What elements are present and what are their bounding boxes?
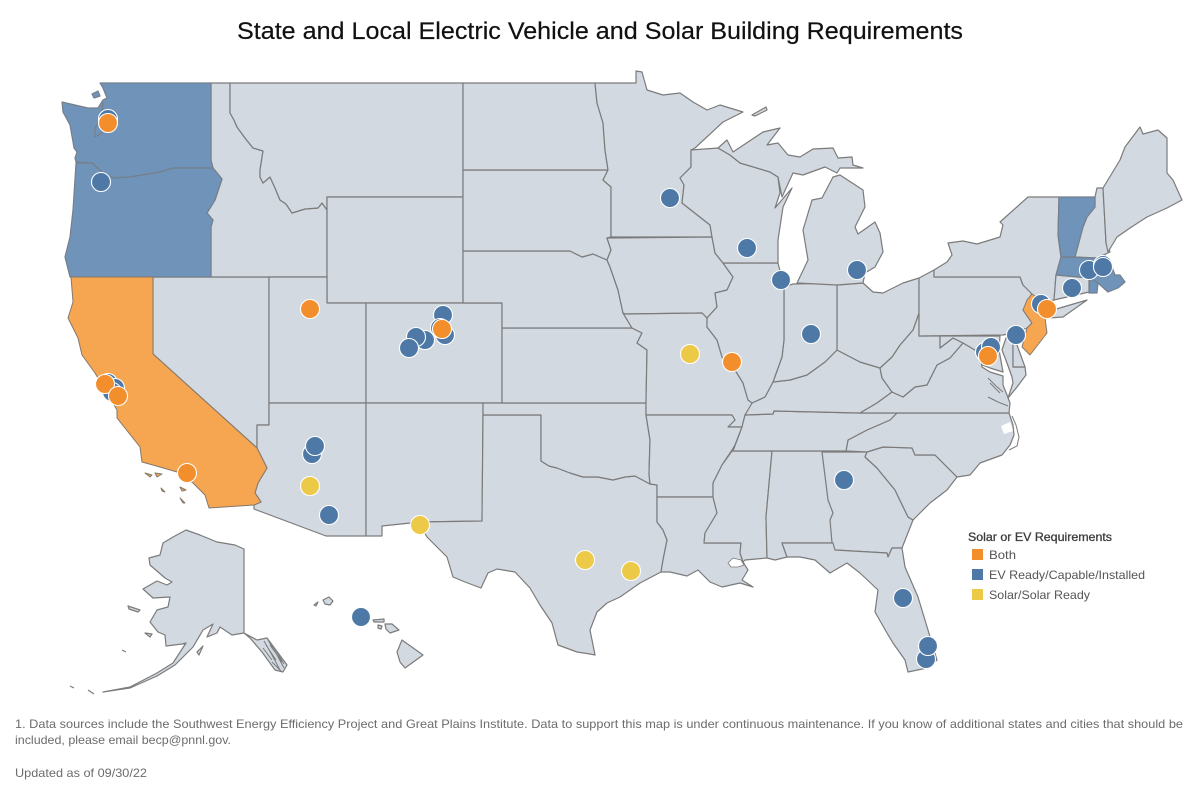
markers: Florida bbox=[894, 588, 938, 668]
Pamlico Sound bbox=[1001, 422, 1013, 434]
marker: Seattle area bbox=[98, 110, 118, 128]
marker: El Paso bbox=[410, 516, 430, 534]
Outer Banks bbox=[1009, 416, 1019, 450]
state: Michigan upper peninsula bbox=[718, 128, 863, 197]
state: Georgia bbox=[822, 452, 913, 557]
state: Missouri bbox=[623, 313, 753, 427]
state: Maryland bbox=[940, 336, 1003, 372]
marker: St. Louis bbox=[722, 352, 742, 372]
state: Colorado bbox=[366, 303, 502, 403]
state: Illinois bbox=[707, 263, 784, 403]
Alaska panhandle detail bbox=[263, 640, 284, 671]
state: Montana bbox=[230, 83, 463, 213]
marker: Austin bbox=[576, 550, 594, 570]
state: Virginia bbox=[860, 343, 1010, 413]
state: Kentucky bbox=[745, 350, 892, 415]
state: Idaho bbox=[207, 83, 327, 277]
state: Wisconsin bbox=[680, 148, 792, 263]
state: Nevada bbox=[153, 277, 269, 448]
state: Arkansas bbox=[646, 415, 742, 497]
state: Vermont bbox=[1058, 197, 1095, 257]
state: New Jersey bbox=[1022, 294, 1048, 355]
Hawaii bbox=[314, 597, 423, 668]
state: Maine bbox=[1103, 127, 1182, 252]
state: Kansas bbox=[502, 328, 647, 403]
state: Connecticut bbox=[1054, 275, 1089, 300]
state: Michigan lower peninsula bbox=[797, 175, 883, 285]
markers: New York City bbox=[1032, 294, 1056, 318]
map of United States bbox=[62, 71, 1182, 694]
state: Delmarva peninsula bbox=[1002, 336, 1026, 398]
state: Tennessee bbox=[733, 411, 897, 451]
state: Texas bbox=[420, 415, 667, 655]
legend title: Solar or EV Requirements bbox=[968, 530, 1112, 544]
state: Utah bbox=[269, 277, 366, 403]
footnote: 1. Data sources include the Southwest Energy Efficiency Project and Great Plains Institute. Data to support this map is under continuous maintenance. If you know of additional states and cities that should be bbox=[15, 717, 1183, 731]
San Juan Islands bbox=[92, 91, 100, 98]
state: Mississippi bbox=[704, 451, 772, 562]
marker: Chicago bbox=[772, 270, 790, 290]
legend bbox=[968, 530, 1145, 602]
Channel Islands bbox=[145, 473, 186, 503]
marker: Minneapolis bbox=[660, 188, 680, 208]
state: Indiana bbox=[773, 283, 837, 382]
Virginia tidal rivers bbox=[988, 378, 1008, 406]
state: Washington bbox=[62, 83, 213, 178]
state: New Mexico bbox=[366, 403, 483, 536]
state: West Virginia bbox=[880, 313, 963, 397]
markers: Colorado bbox=[400, 306, 454, 358]
marker: Houston bbox=[622, 562, 640, 580]
markers: Bay Area bbox=[96, 374, 128, 406]
state: New York bbox=[934, 197, 1061, 303]
state: North Dakota bbox=[463, 83, 608, 170]
legend item: both bbox=[972, 548, 1016, 562]
state: Ohio bbox=[837, 278, 919, 368]
marker: Missouri bbox=[680, 344, 700, 364]
state: Nebraska bbox=[463, 251, 632, 328]
markers: New England bbox=[1062, 256, 1112, 298]
state: Florida bbox=[782, 543, 937, 672]
marker: Utah bbox=[300, 300, 320, 318]
state: Oregon bbox=[65, 163, 222, 277]
state: Massachusetts bbox=[1056, 255, 1125, 292]
state: Minnesota bbox=[595, 71, 743, 237]
state: Pennsylvania bbox=[919, 270, 1032, 336]
state: Iowa bbox=[607, 237, 733, 318]
markers: Arizona bbox=[300, 436, 338, 524]
marker: Indianapolis bbox=[802, 324, 820, 344]
state: South Dakota bbox=[463, 170, 611, 260]
legend item: both: Both bbox=[989, 548, 1016, 562]
update date: Updated as of 09/30/22 bbox=[15, 766, 147, 780]
marker: Portland bbox=[92, 172, 110, 192]
Lake Pontchartrain bbox=[728, 558, 744, 567]
Puget Sound detail bbox=[95, 103, 103, 137]
footnote: included, please email becp@pnnl.gov. bbox=[15, 733, 231, 747]
marker: Los Angeles bbox=[178, 464, 196, 482]
marker: Madison bbox=[738, 238, 756, 258]
marker: Hawaii bbox=[352, 608, 370, 626]
legend item: EV: EV Ready/Capable/Installed bbox=[989, 568, 1145, 582]
footnote bbox=[15, 717, 1183, 747]
markers: Washington DC bbox=[976, 338, 1000, 366]
state: South Carolina bbox=[865, 447, 957, 520]
state: Rhode Island bbox=[1089, 278, 1098, 293]
marker: Atlanta bbox=[834, 470, 854, 490]
state: Isle Royale bbox=[752, 107, 767, 116]
state: Louisiana bbox=[657, 497, 753, 587]
legend item: solar: Solar/Solar Ready bbox=[989, 588, 1090, 602]
state: Wyoming bbox=[327, 197, 463, 303]
state: Delaware bbox=[1013, 337, 1025, 367]
state: North Carolina bbox=[846, 413, 1014, 477]
state: Oklahoma bbox=[483, 403, 650, 484]
state: Long Island bbox=[1048, 300, 1087, 318]
state: New Hampshire bbox=[1075, 188, 1110, 258]
state: Alabama bbox=[766, 451, 835, 560]
Alaska islands bbox=[70, 606, 203, 694]
state: Arizona bbox=[254, 403, 366, 536]
markers: locations bbox=[92, 110, 1112, 668]
state: California bbox=[68, 277, 267, 508]
title: State and Local Electric Vehicle and Solar Building Requirements bbox=[237, 18, 963, 45]
marker: Philadelphia bbox=[1006, 326, 1026, 344]
marker: Detroit bbox=[848, 260, 866, 280]
Alaska bbox=[103, 530, 287, 692]
